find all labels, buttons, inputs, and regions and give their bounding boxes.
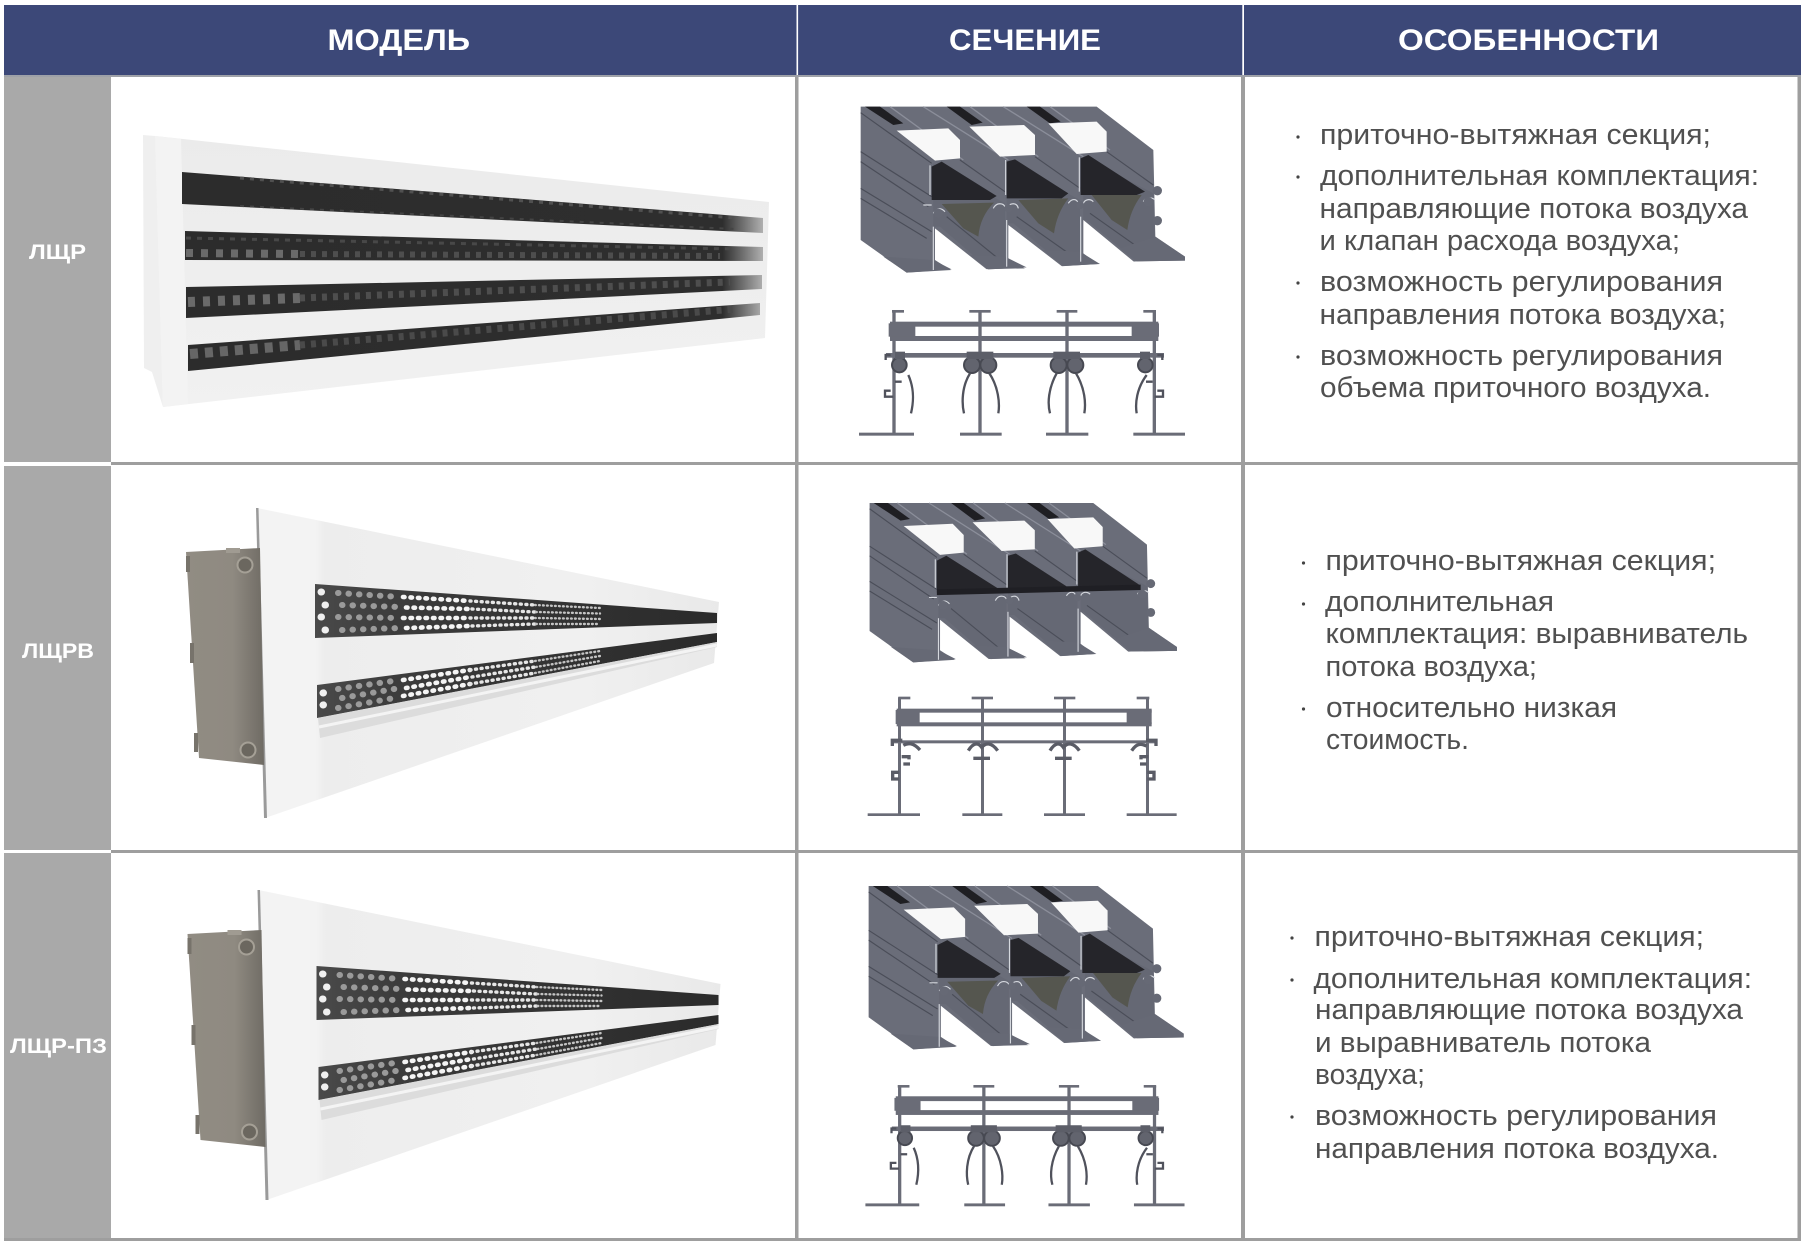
features text: ЛЩР-ПЗ: воздуха; xyxy=(1315,1059,1425,1091)
features text: ЛЩР-ПЗ xyxy=(1290,921,1752,1165)
features text: ЛЩРВ: потока воздуха; xyxy=(1326,651,1537,683)
features text: ЛЩРВ xyxy=(1302,545,1748,756)
row label: ЛЩРВ: ЛЩРВ xyxy=(22,640,94,663)
features text: ЛЩРВ: приточно-вытяжная секция; xyxy=(1326,545,1716,577)
features text: ЛЩР: направляющие потока воздуха xyxy=(1320,193,1749,225)
features text: ЛЩР-ПЗ: и выравниватель потока xyxy=(1315,1027,1652,1059)
features text: ЛЩРВ: дополнительная xyxy=(1325,586,1554,618)
heading: model: МОДЕЛЬ xyxy=(328,24,470,57)
features text: ЛЩР: приточно-вытяжная секция; xyxy=(1320,119,1711,151)
product image: ЛЩР-ПЗ perforated grille xyxy=(188,890,720,1200)
table header band xyxy=(4,5,1801,77)
features text: ЛЩР: возможность регулирования xyxy=(1320,340,1723,372)
features text: ЛЩР-ПЗ: направления потока воздуха. xyxy=(1315,1133,1719,1165)
product image: ЛЩРВ perforated grille xyxy=(186,508,719,818)
heading: section: СЕЧЕНИЕ xyxy=(949,24,1101,57)
flat cross-section xyxy=(859,310,1185,436)
features text: ЛЩРВ: относительно низкая xyxy=(1326,692,1617,724)
features text: ЛЩР: дополнительная комплектация: xyxy=(1320,160,1759,192)
section diagram: ЛЩРВ xyxy=(868,503,1177,816)
row label: ЛЩРВ xyxy=(4,466,111,850)
flat cross-section xyxy=(865,1085,1185,1206)
product image: ЛЩР four-slot grille xyxy=(143,135,769,407)
heading: features: ОСОБЕННОСТИ xyxy=(1398,24,1659,57)
features text: ЛЩР: объема приточного воздуха. xyxy=(1320,372,1711,404)
features text: ЛЩР-ПЗ: возможность регулирования xyxy=(1315,1100,1717,1132)
row label: ЛЩР: ЛЩР xyxy=(29,241,86,264)
features text: ЛЩР: возможность регулирования xyxy=(1320,266,1723,298)
features text: ЛЩР-ПЗ: дополнительная комплектация: xyxy=(1314,963,1752,995)
isometric profile xyxy=(870,503,1177,662)
features text: ЛЩР-ПЗ: приточно-вытяжная секция; xyxy=(1314,921,1704,953)
features text: ЛЩР-ПЗ: направляющие потока воздуха xyxy=(1315,994,1744,1026)
section diagram: ЛЩР-ПЗ xyxy=(865,886,1185,1206)
features text: ЛЩР: направления потока воздуха; xyxy=(1320,299,1726,331)
row label: ЛЩР-ПЗ xyxy=(4,853,111,1238)
features text: ЛЩР xyxy=(1296,119,1759,404)
row label: ЛЩР xyxy=(4,77,111,462)
features text: ЛЩРВ: комплектация: выравниватель xyxy=(1326,618,1748,650)
row label: ЛЩР-ПЗ: ЛЩР-ПЗ xyxy=(10,1035,107,1058)
section diagram: ЛЩР xyxy=(859,107,1185,436)
features text: ЛЩР: и клапан расхода воздуха; xyxy=(1320,225,1680,257)
flat cross-section xyxy=(868,697,1177,816)
isometric profile xyxy=(869,886,1184,1049)
features text: ЛЩРВ: стоимость. xyxy=(1326,724,1469,756)
isometric profile xyxy=(861,107,1185,273)
